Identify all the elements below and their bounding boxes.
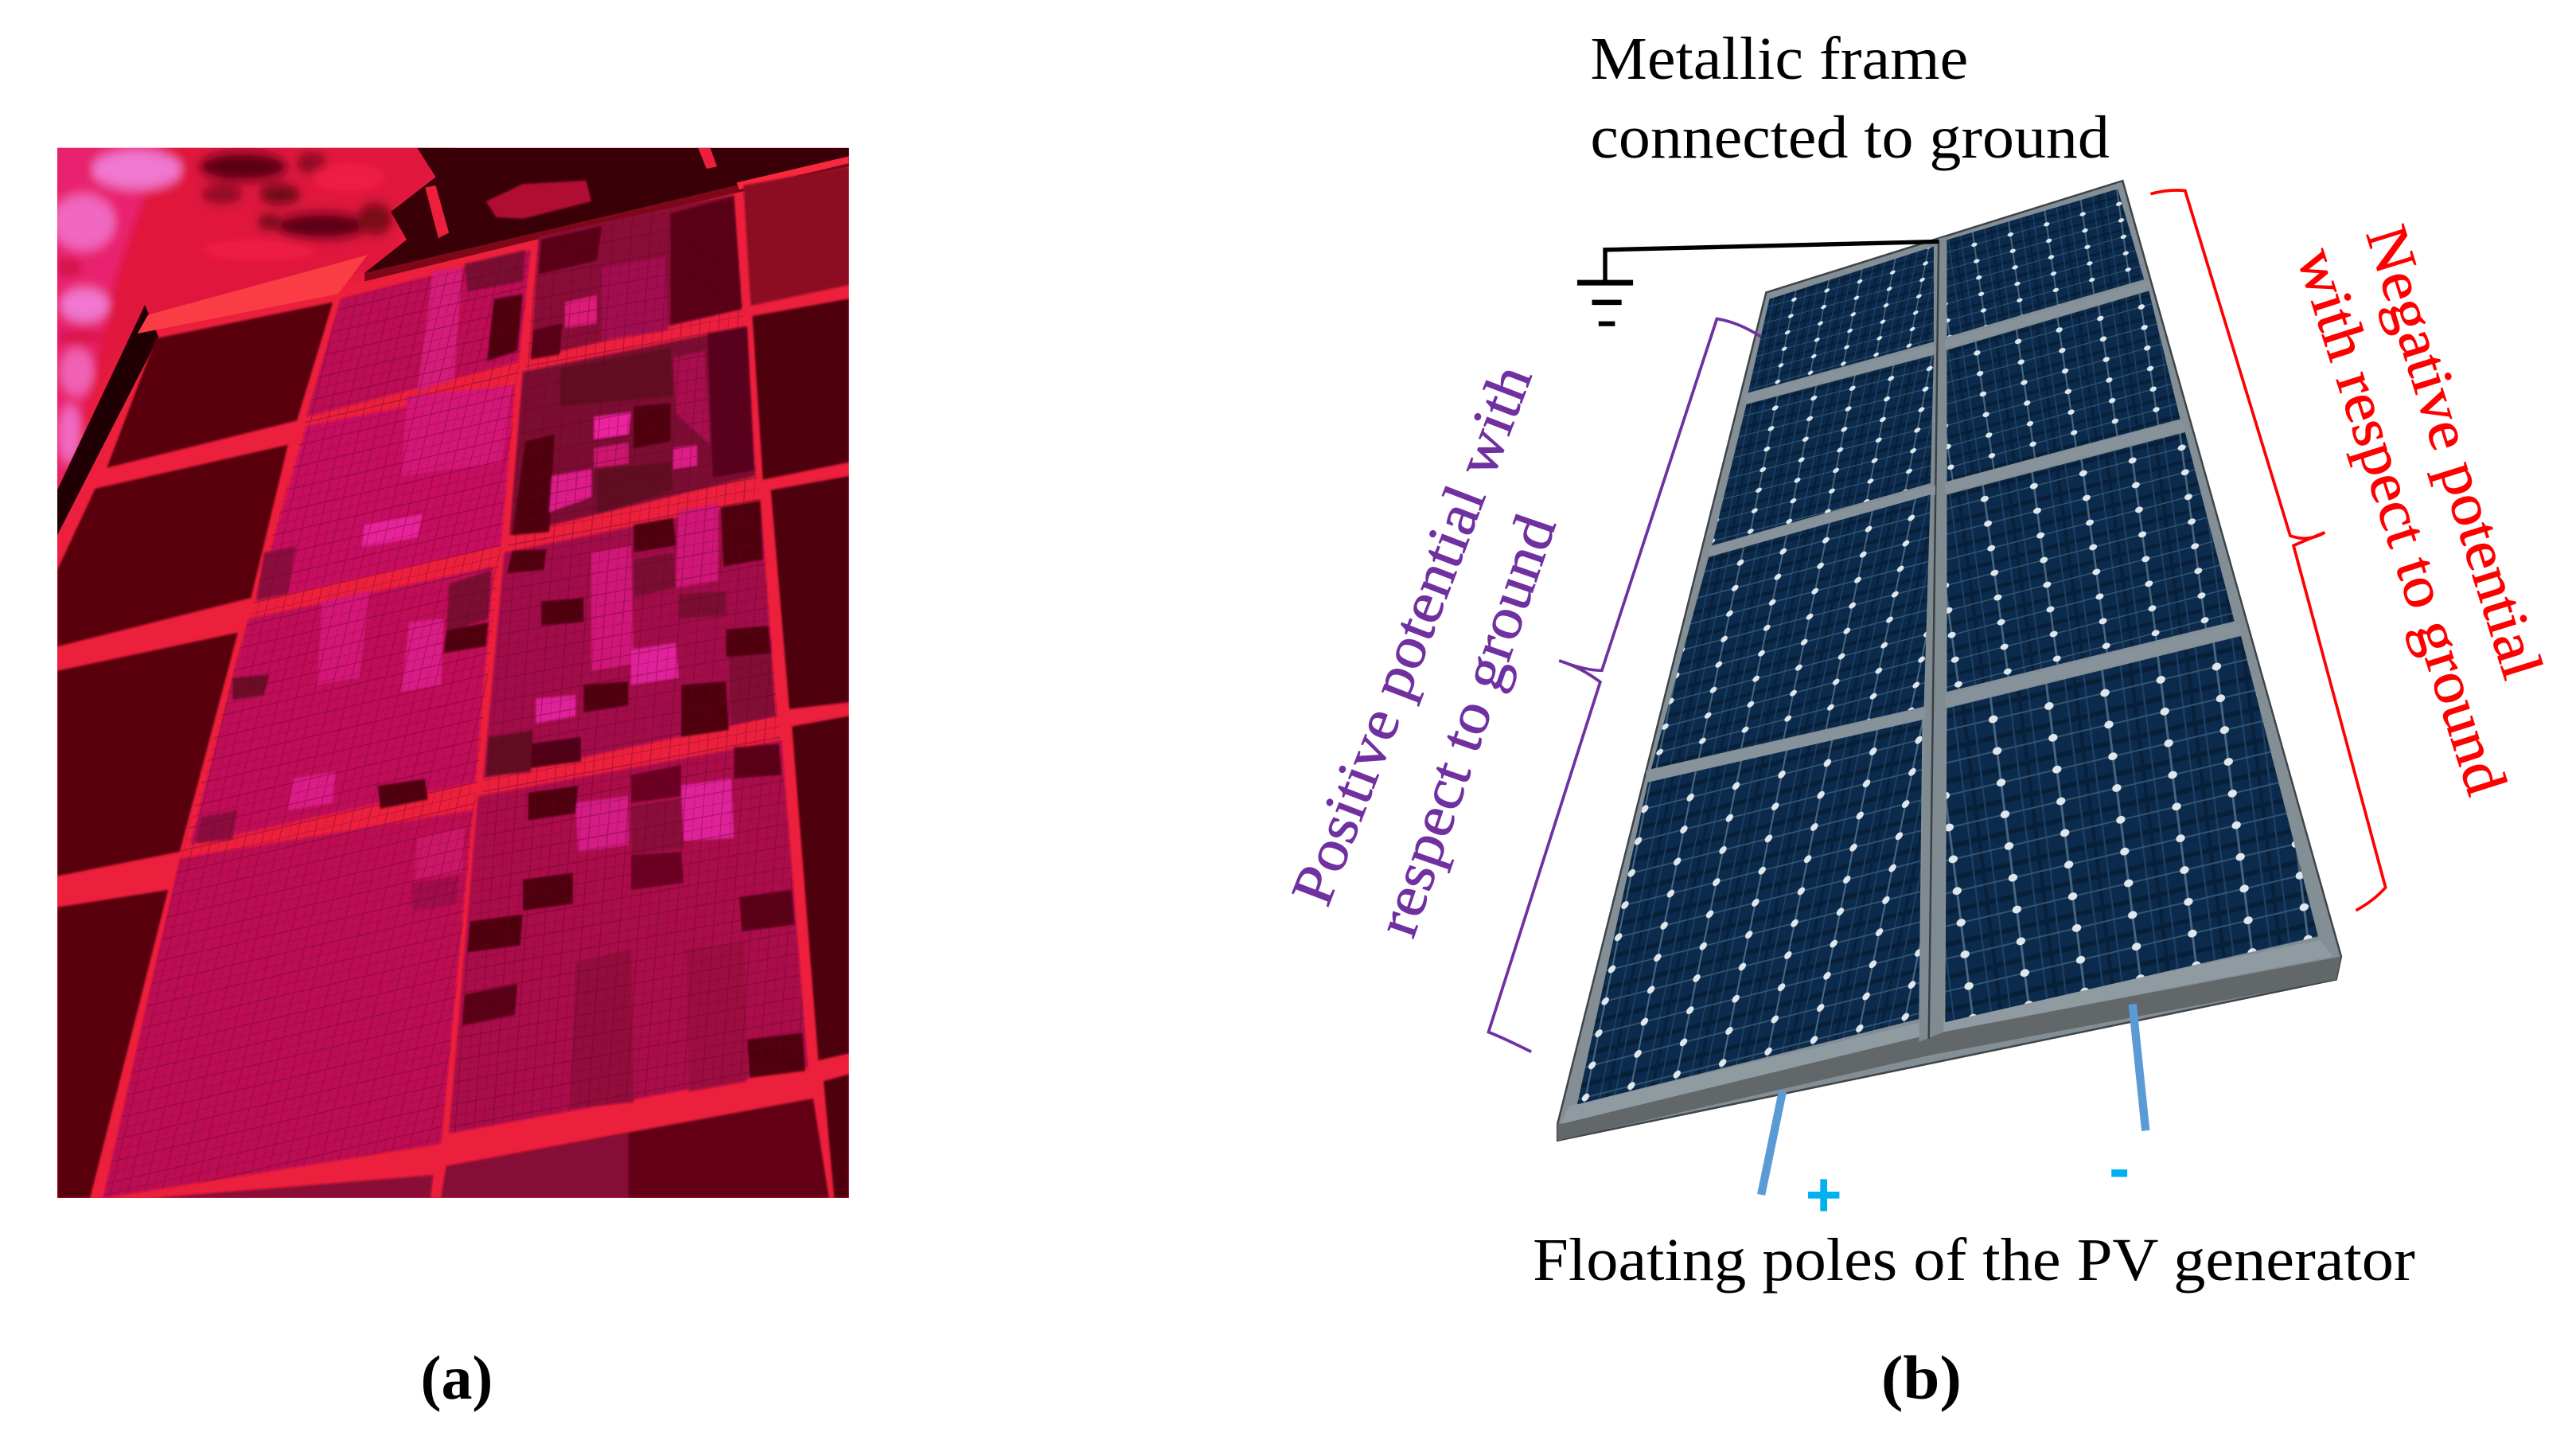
- label: metallic frame: connected to ground: [1590, 103, 2110, 171]
- hot and dark cells, top mottled modules: [512, 197, 754, 535]
- label: positive potential: respect to ground: [1364, 507, 1569, 944]
- column of dark modules: [57, 302, 333, 1198]
- right column modules: [1945, 189, 2318, 1022]
- centre seam: [1929, 240, 1939, 1039]
- column of mottled modules: [449, 194, 808, 1134]
- red bracket: [2150, 190, 2386, 911]
- label: negative potential: with respect to ground: [2284, 240, 2519, 802]
- hot and dark cells, first bright column: [196, 250, 525, 911]
- centre frame bar: [1919, 236, 1947, 1042]
- negative pole wire: [2133, 1004, 2145, 1130]
- lower frame highlight: [1561, 940, 2333, 1124]
- sky and foliage: [57, 148, 454, 495]
- photo frame structure base: [57, 148, 849, 1198]
- caption (a): (a): [421, 1343, 493, 1412]
- minus sign: -: [2109, 1134, 2130, 1204]
- label: floating poles: Floating poles of the PV generator: [1533, 1226, 2415, 1294]
- front edge of the frame: [1557, 957, 2341, 1141]
- row frame bars: [1647, 281, 2241, 782]
- PV array frame: [1557, 181, 2341, 1141]
- cell grid lines: [103, 194, 808, 1198]
- roof edge strips: [57, 156, 849, 535]
- right edge dark modules: [441, 166, 849, 1198]
- dark tree background: [364, 148, 849, 281]
- label: negative potential: Negative potential: [2353, 218, 2555, 686]
- positive pole wire: [1761, 1091, 1783, 1195]
- hot and dark cells, third mottled module: [486, 501, 775, 777]
- label: positive potential: Positive potential with: [1279, 357, 1545, 914]
- ground symbol and wire: [1577, 241, 1939, 324]
- caption (b): (b): [1881, 1343, 1962, 1412]
- hot and dark cells, fourth mottled module: [462, 743, 805, 1109]
- panel (a): infrared photo of PV modules: [26, 107, 849, 1198]
- panel (b): PV generator diagram: [421, 25, 2555, 1412]
- purple bracket: [1488, 319, 1761, 1052]
- column of bright modules: [103, 250, 531, 1198]
- label: metallic frame: Metallic frame: [1590, 25, 1968, 92]
- plus sign: +: [1806, 1160, 1842, 1230]
- left column modules: [1577, 247, 1934, 1104]
